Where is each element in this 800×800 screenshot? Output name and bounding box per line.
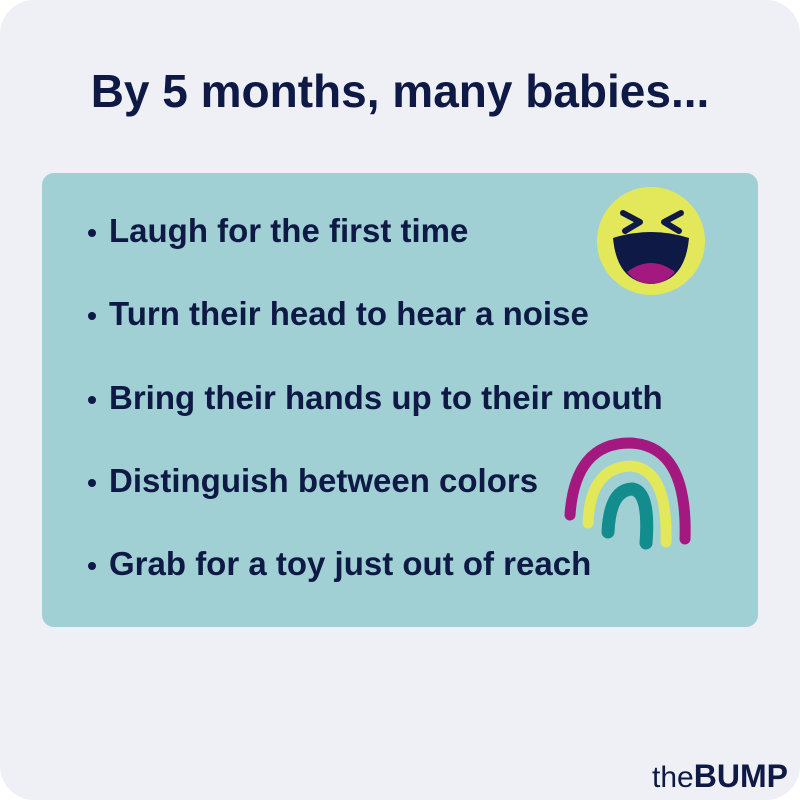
panel: milestones [42,173,758,627]
item 1: Laugh for the first time [109,212,468,249]
item 2: Turn their head to hear a noise [109,295,589,332]
logo: theBUMP [652,758,788,794]
icon: rainbow [564,438,691,550]
title: By 5 months, many babies... [91,65,709,117]
item 4: Distinguish between colors [109,462,538,499]
item 3: Bring their hands up to their mouth [109,379,663,416]
item 5: Grab for a toy just out of reach [109,545,591,582]
icon: laughing emoji [597,187,705,295]
